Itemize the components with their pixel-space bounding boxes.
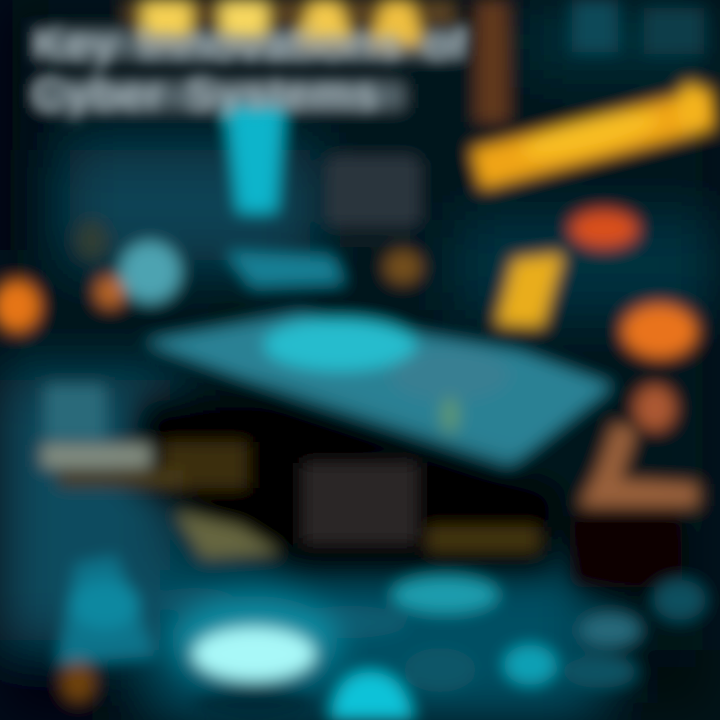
- icon: glowing bowl: [171, 596, 339, 718]
- icon: ceiling lights: [125, 0, 455, 44]
- icon: small amber light: [62, 662, 94, 702]
- title: [24, 18, 476, 128]
- panel: right orange figure: [570, 386, 698, 587]
- icon: cyan pads: [155, 577, 706, 720]
- title: Cyber Systems: [31, 67, 379, 119]
- panel: dark monitor: [326, 156, 420, 247]
- icon: orange and yellow lights: [0, 211, 697, 357]
- icon: brown pillar: [476, 0, 704, 122]
- panel: lower left cyan block: [58, 556, 155, 664]
- panel: title backing band: [38, 32, 462, 108]
- panel: olive machinery details: [42, 385, 538, 558]
- icon: cyan column: [226, 105, 284, 212]
- panel: upper left cyan objects: [120, 242, 344, 330]
- panel: yellow sign: [472, 84, 716, 188]
- panel: large cyan tabletop: [145, 314, 612, 466]
- panel: dark machinery under table: [130, 400, 680, 590]
